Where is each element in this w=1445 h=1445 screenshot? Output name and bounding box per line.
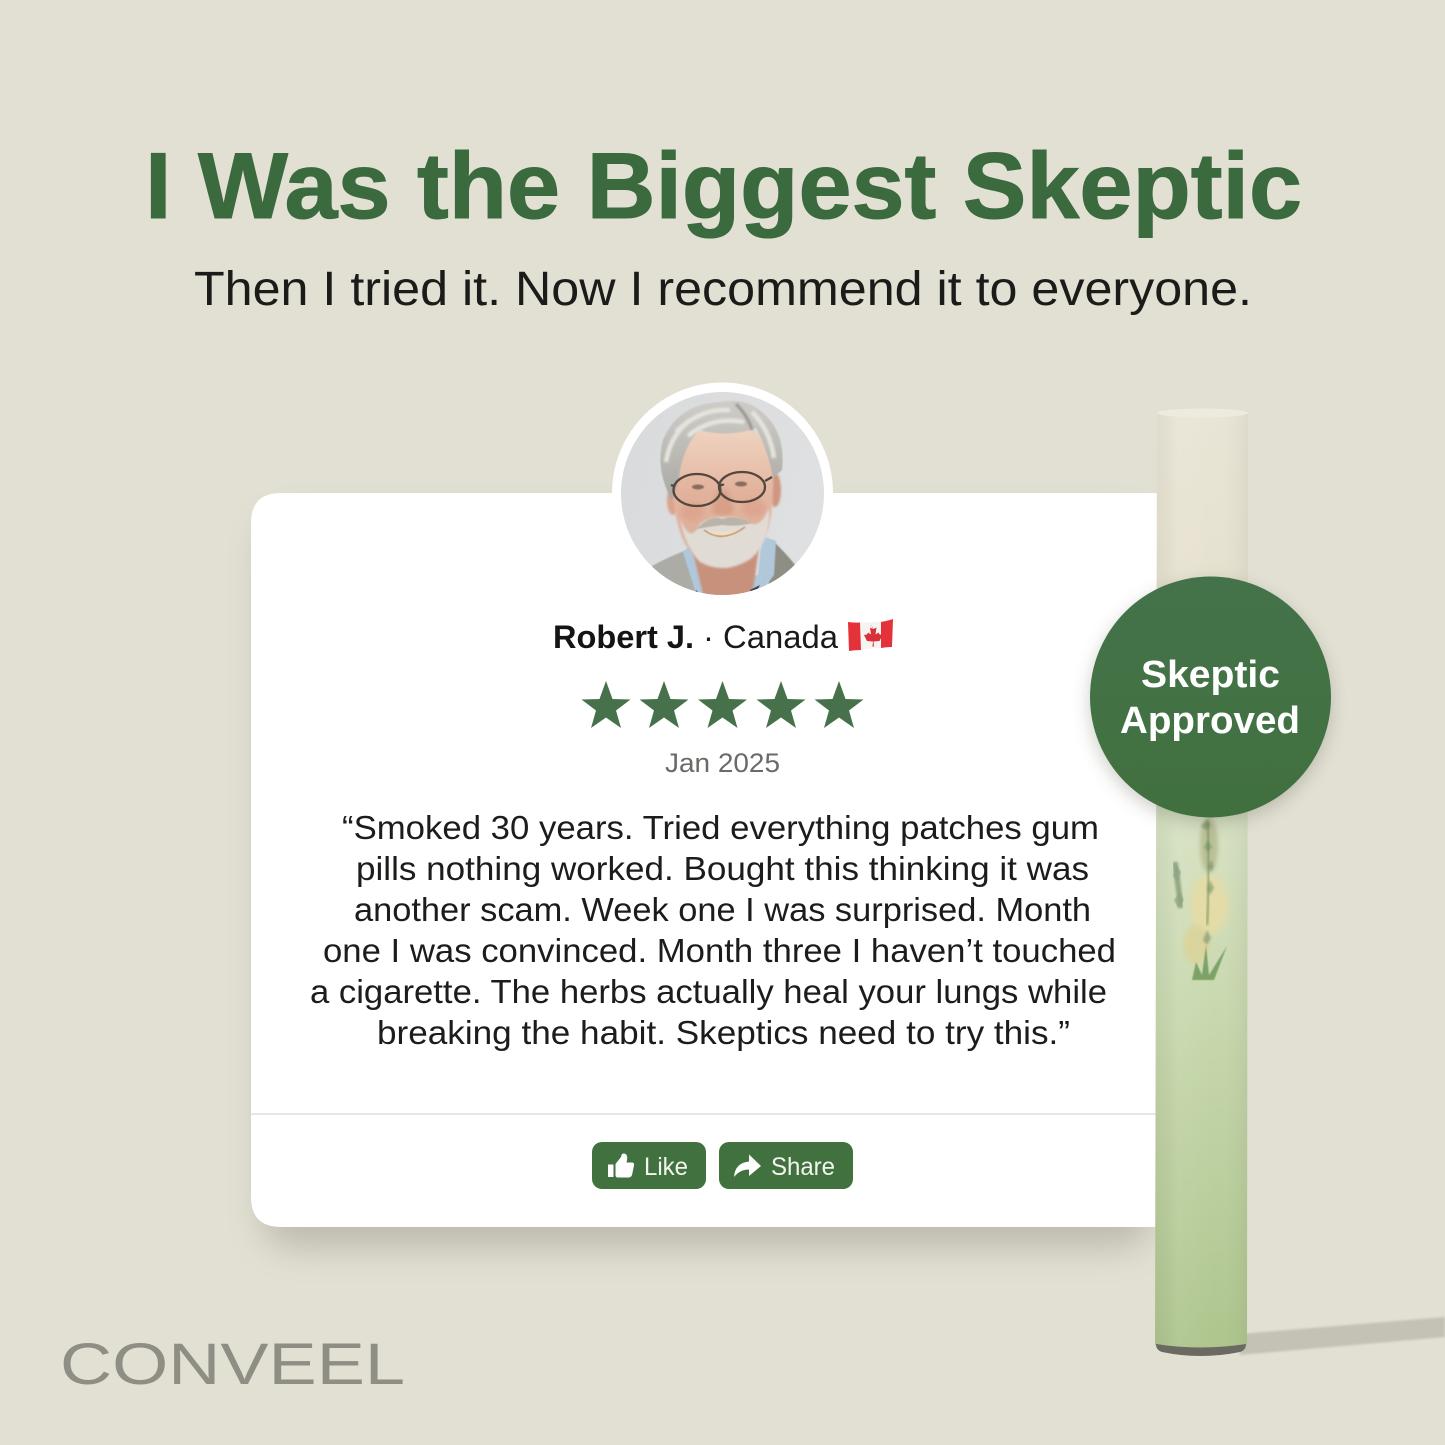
card background (251, 493, 1160, 1227)
review quote: “Smoked 30 years. Tried everything patches gum (342, 810, 1099, 847)
like button (592, 1142, 706, 1189)
sweater (652, 550, 697, 592)
glasses (671, 472, 772, 506)
neck (692, 548, 760, 595)
product tube (1155, 408, 1248, 1356)
reviewer line: Robert J. (553, 619, 694, 655)
review quote: a cigarette. The herbs actually heal your lungs while (310, 974, 1107, 1011)
smile (706, 528, 743, 538)
tube body (1155, 410, 1248, 1352)
eyes (692, 484, 704, 490)
review quote: one I was convinced. Month three I haven’t touched (323, 933, 1116, 970)
review quote: pills nothing worked. Bought this thinking it was (356, 851, 1089, 888)
moustache (696, 517, 752, 529)
panel: review card (251, 493, 1160, 1227)
tube base (1156, 1344, 1246, 1356)
icon: Canadian flag (848, 619, 893, 651)
tube cast shadow (1240, 1317, 1445, 1355)
herbal sprig illustration (1173, 817, 1228, 980)
share button (719, 1142, 853, 1189)
badge: skeptic approved: Approved (1120, 700, 1300, 742)
avatar photo (620, 391, 826, 600)
ears (666, 491, 676, 516)
card shadow (262, 518, 1152, 1248)
tube top cap (1157, 408, 1248, 418)
reviewer line (553, 619, 838, 655)
beard (680, 508, 769, 568)
shirt (683, 536, 776, 600)
nose (712, 490, 734, 516)
review quote: another scam. Week one I was surprised. Month (354, 892, 1091, 929)
icon: thumbs up (608, 1153, 634, 1178)
review quote (310, 810, 1116, 1052)
avatar ring (612, 383, 833, 493)
subtitle: Then I tried it. Now I recommend it to everyone. (194, 263, 1252, 316)
badge shadow (1090, 583, 1330, 823)
brand logo: CONVEEL (60, 1332, 405, 1397)
review quote: breaking the habit. Skeptics need to try this.” (377, 1015, 1070, 1052)
like button: Like (644, 1153, 688, 1181)
face (674, 430, 774, 555)
badge: skeptic approved (1090, 576, 1331, 818)
icon: share arrow (734, 1154, 761, 1177)
rating stars (582, 681, 864, 728)
cheek flush (681, 506, 703, 520)
share button: Share (771, 1153, 835, 1181)
reviewer line: · Canada (703, 619, 838, 655)
review date: Jan 2025 (665, 748, 780, 778)
badge: skeptic approved: Skeptic (1141, 654, 1280, 696)
title: I Was the Biggest Skeptic (145, 133, 1302, 238)
hair (660, 401, 783, 500)
